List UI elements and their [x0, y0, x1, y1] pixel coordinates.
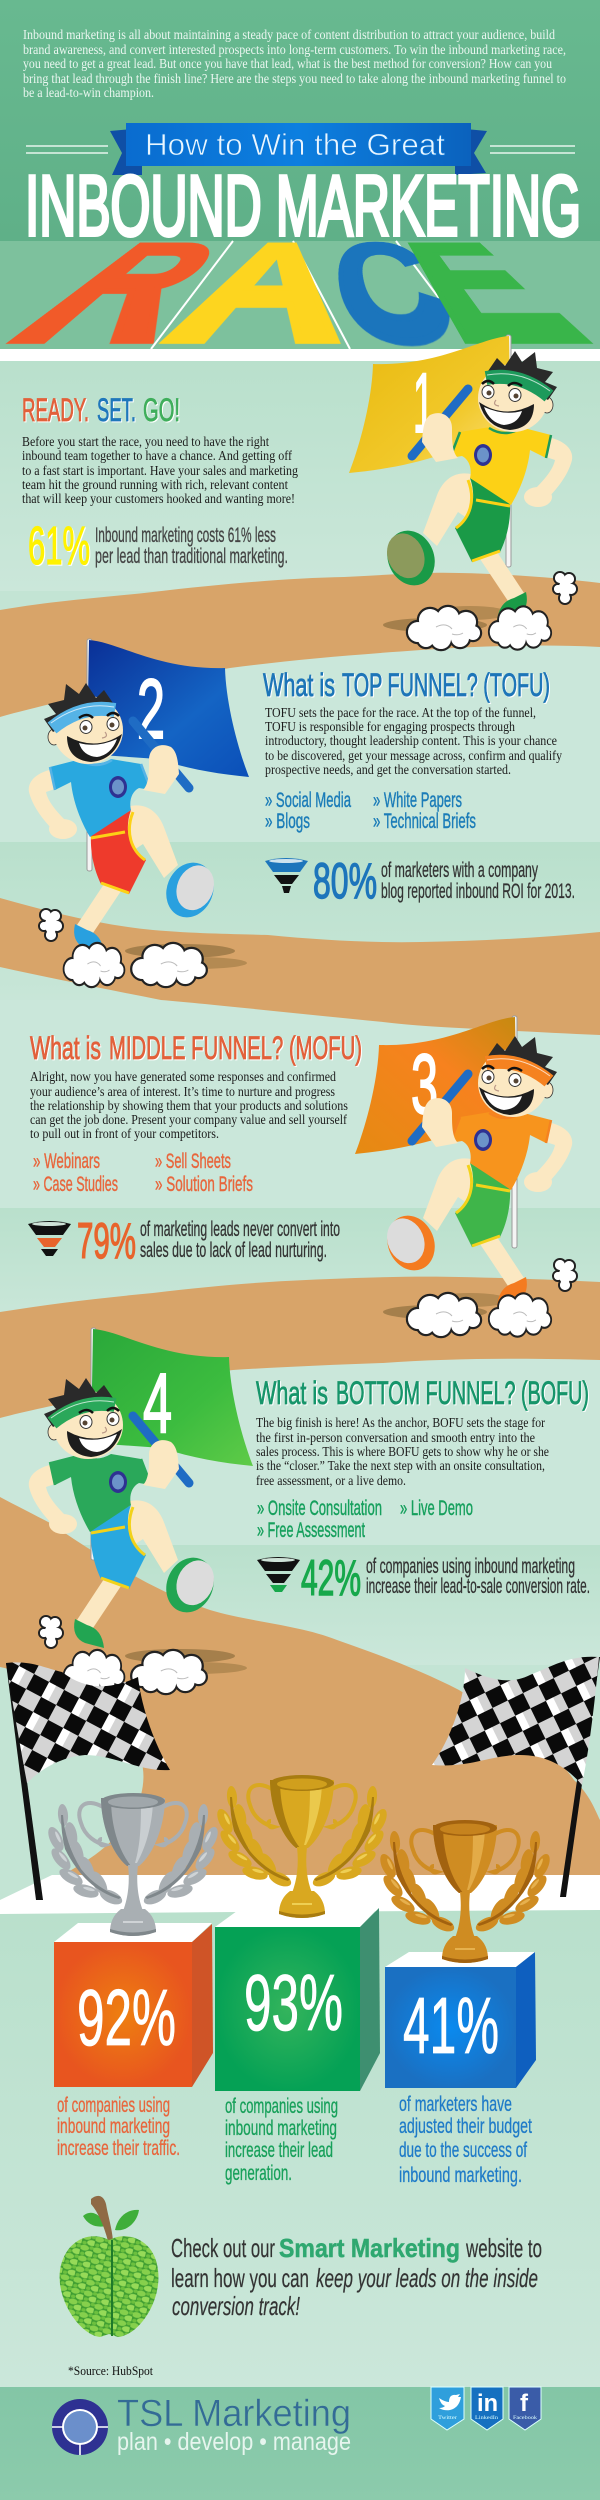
- caption: 93%: [225, 2095, 338, 2185]
- heading: Ready. Set. Go!: SET.: [97, 392, 136, 428]
- podium block: 92%: 92%: [77, 1973, 176, 2062]
- checkered flag left: [6, 1662, 170, 1900]
- footer logo: TSL Marketing: [52, 2393, 351, 2456]
- stat: 80%: [313, 853, 575, 909]
- title word: RACE in perspective: [0, 228, 600, 403]
- stat: 61%: 61%: [28, 516, 90, 576]
- call to action text: Check out our: [171, 2233, 275, 2263]
- stat: 61%: [28, 516, 288, 576]
- mofu body text: your audience’s area of interest. It’s time to nurture and progress: [30, 1085, 335, 1100]
- tofu content list: » Technical Briefs: [373, 810, 476, 833]
- heading: top funnel: What is: [263, 667, 335, 703]
- tofu content list: [265, 789, 476, 833]
- tofu content list: » White Papers: [373, 789, 462, 812]
- tofu body text: prospective needs, and get the conversation started.: [265, 763, 511, 778]
- bofu content list: » Free Assessment: [257, 1519, 365, 1542]
- heading: Ready. Set. Go!: GO!: [143, 392, 180, 428]
- heading: middle funnel: MIDDLE FUNNEL? (MOFU): [109, 1030, 362, 1066]
- runner 2: blue flag: 2: [137, 662, 165, 756]
- call to action text: Smart Marketing: [279, 2233, 460, 2263]
- caption: 41%: of marketers have: [399, 2093, 512, 2116]
- call to action text: learn how you can: [171, 2263, 309, 2293]
- mofu content list: » Webinars: [33, 1150, 100, 1173]
- ready set go body text: team hit the ground running with rich, relevant content: [22, 478, 288, 493]
- tofu body text: TOFU sets the pace for the race. At the top of the funnel,: [265, 706, 536, 721]
- tofu body text: TOFU is responsible for engaging prospects through: [265, 720, 515, 735]
- bofu body text: free assessment, or a live demo.: [256, 1474, 406, 1489]
- caption: 93%: increase their lead: [225, 2139, 333, 2162]
- call to action text: website to: [465, 2233, 542, 2263]
- icon: Facebook badge: [509, 2387, 541, 2430]
- mofu body text: the relationship by showing them that your products and solutions: [30, 1099, 348, 1114]
- icon: Twitter badge: [431, 2387, 464, 2430]
- bofu body text: the first in-person conversation and smooth entry into the: [256, 1431, 535, 1446]
- icon: LinkedIn badge: in: [477, 2390, 498, 2417]
- heading: Ready. Set. Go!: READY.: [22, 392, 89, 428]
- tofu body text: [265, 706, 562, 778]
- checkered flag right: [432, 1657, 600, 1897]
- intro paragraph: [23, 28, 566, 101]
- caption: 93%: inbound marketing: [225, 2117, 337, 2140]
- ready set go body text: Before you start the race, you need to have the right: [22, 435, 269, 450]
- icon: Facebook badge: Facebook: [513, 2415, 537, 2421]
- caption: 41%: inbound marketing.: [399, 2164, 522, 2187]
- call to action text: [171, 2233, 542, 2321]
- footer logo: TSL Marketing: plan • develop • manage: [117, 2428, 351, 2456]
- stat: 61%: Inbound marketing costs 61% less: [95, 524, 276, 547]
- caption: 93%: of companies using: [225, 2095, 338, 2118]
- ready set go body text: inbound team together to have a chance. And getting off: [22, 449, 292, 464]
- stat: 42%: 42%: [301, 1550, 361, 1606]
- stat: 79%: of marketing leads never convert into: [140, 1218, 340, 1241]
- tofu content list: » Social Media: [265, 789, 351, 812]
- bofu body text: [256, 1416, 549, 1489]
- heading: top funnel: [263, 667, 550, 703]
- runner 3: orange flag: 3: [411, 1037, 438, 1131]
- tofu body text: introductory, thought leadership content. This is your chance: [265, 734, 557, 749]
- runner 1: yellow flag: [349, 335, 577, 650]
- bofu content list: » Onsite Consultation: [257, 1497, 382, 1520]
- tofu content list: » Blogs: [265, 810, 310, 833]
- title word: RACE in perspective: A: [118, 228, 344, 403]
- icon: Twitter badge: Twitter: [438, 2415, 457, 2421]
- icon: Facebook badge: f: [520, 2390, 529, 2417]
- ready set go body text: that will keep your customers hooked and wanting more!: [22, 492, 295, 507]
- runner 3: orange flag: [355, 1016, 577, 1337]
- heading: bottom funnel: What is: [256, 1375, 328, 1411]
- mofu body text: [30, 1070, 348, 1142]
- icon: funnel, middle orange: [28, 1221, 71, 1256]
- title banner: How to Win the Great: How to Win the Great: [145, 127, 445, 162]
- heading: middle funnel: What is: [30, 1030, 101, 1066]
- caption: 92%: [57, 2094, 180, 2160]
- caption: 41%: [399, 2093, 532, 2187]
- trophy: gold: [214, 1775, 390, 1918]
- caption: 41%: due to the success of: [399, 2139, 527, 2162]
- runner 4: green flag: 4: [143, 1356, 172, 1450]
- call to action text: conversion track!: [172, 2291, 300, 2321]
- icon: funnel, top blue: [265, 858, 308, 893]
- bofu body text: The big finish is here! As the anchor, BOFU sets the stage for: [256, 1416, 545, 1431]
- caption: 92%: increase their traffic.: [57, 2137, 180, 2160]
- podium block: 93%: 93%: [244, 1958, 343, 2047]
- title banner: How to Win the Great: [26, 123, 575, 175]
- stat: 79%: 79%: [77, 1213, 136, 1269]
- stat: 80%: 80%: [313, 853, 377, 909]
- caption: 41%: adjusted their budget: [399, 2115, 532, 2138]
- mofu content list: [33, 1150, 253, 1196]
- trophy: silver: [45, 1793, 221, 1936]
- source note: *Source: HubSpot: [68, 2363, 153, 2378]
- icon: LinkedIn badge: LinkedIn: [475, 2415, 498, 2421]
- bofu body text: is the “closer.” Take the next step with an onsite consultation,: [256, 1459, 545, 1474]
- title word: RACE in perspective: C: [333, 228, 510, 403]
- intro paragraph: be a lead-to-win champion.: [23, 86, 154, 101]
- stat: 42%: [301, 1550, 590, 1606]
- bofu content list: [257, 1497, 473, 1542]
- caption: 92%: inbound marketing: [57, 2115, 170, 2138]
- mofu body text: to pull out in front of your competitors.: [30, 1127, 219, 1142]
- stat: 79%: [77, 1213, 340, 1269]
- mofu content list: » Sell Sheets: [155, 1150, 231, 1173]
- mofu content list: » Case Studies: [33, 1173, 118, 1196]
- ready set go body text: to a fast start is important. Have your sales and marketing: [22, 464, 298, 479]
- stat: 79%: sales due to lack of lead nurturing.: [140, 1239, 327, 1262]
- runner 1: yellow flag: 1: [413, 356, 434, 450]
- ready set go body text: [22, 435, 298, 507]
- trophy: bronze: [377, 1820, 553, 1963]
- runner 4: green flag: [29, 1328, 253, 1694]
- mofu body text: can get the job done. Present your company value and sell yourself: [30, 1113, 347, 1128]
- icon: green brain apple: [60, 2196, 158, 2337]
- stat: 61%: per lead than traditional marketing.: [95, 545, 288, 568]
- footer logo: TSL Marketing: TSL Marketing: [117, 2393, 351, 2435]
- mofu content list: » Solution Briefs: [155, 1173, 253, 1196]
- podium block: 41%: [385, 1952, 536, 2088]
- podium block: 93%: [215, 1907, 380, 2091]
- runner 2: blue flag: [29, 639, 249, 987]
- bofu body text: sales process. This is where BOFU gets to show why he or she: [256, 1445, 549, 1460]
- bofu content list: » Live Demo: [400, 1497, 473, 1520]
- icon: funnel, bottom green: [257, 1557, 300, 1592]
- caption: 92%: of companies using: [57, 2094, 170, 2117]
- mofu body text: Alright, now you have generated some responses and confirmed: [30, 1070, 336, 1085]
- podium block: 92%: [54, 1923, 213, 2087]
- podium block: 41%: 41%: [403, 1981, 499, 2070]
- icon: LinkedIn badge: [471, 2387, 503, 2430]
- caption: 93%: generation.: [225, 2162, 292, 2185]
- heading: middle funnel: [30, 1030, 362, 1066]
